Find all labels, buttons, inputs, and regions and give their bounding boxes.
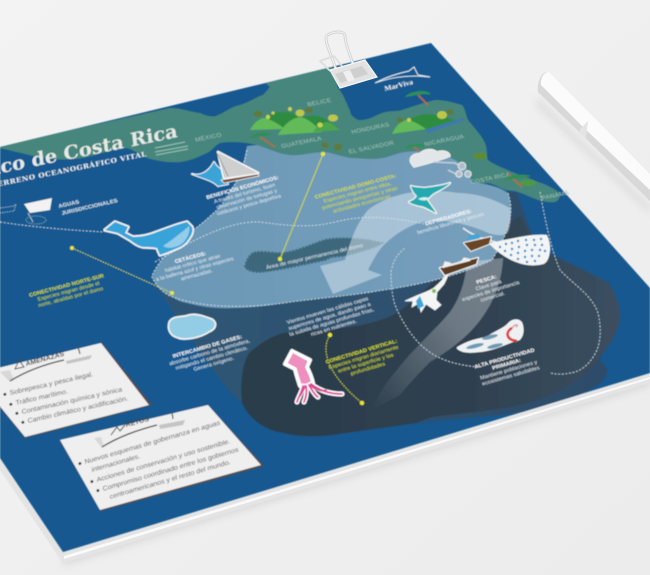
country labels: PANAMÁ bbox=[541, 190, 571, 202]
country labels: MÉXICO bbox=[194, 132, 223, 143]
text: conectividad norte-sur: CONECTIVIDAD NORTE-SUR bbox=[28, 273, 105, 299]
text: intercambio de gases: mitigando el cambio climático. bbox=[175, 345, 249, 372]
text: vientos: superiores de agua, dando paso a bbox=[288, 302, 373, 332]
text: vientos bbox=[285, 296, 378, 344]
list: retos: internacionales. bbox=[91, 453, 141, 474]
region: continental shelf (light water) bbox=[152, 145, 511, 308]
legend: aguas jurisdiccionales bbox=[0, 198, 119, 224]
text: depredadores: DEPREDADORES: bbox=[425, 209, 473, 227]
text: beneficios económicos: A través del turismo, buen bbox=[213, 182, 276, 205]
text: alta productividad primaria: ecosistemas saludables bbox=[481, 365, 541, 387]
list: amenazas: Tráfico marítimo. bbox=[15, 388, 68, 407]
text: beneficios económicos: cetáceos y pesca deportiva bbox=[216, 193, 282, 217]
text: intercambio de gases: absorbe carbono de la atmósfera, bbox=[168, 338, 252, 367]
text: intercambio de gases bbox=[166, 333, 256, 379]
text: intercambio de gases: Genera oxígeno. bbox=[193, 356, 236, 373]
big arrow: surface current curving down bbox=[320, 191, 511, 294]
text: conectividad domo-costa bbox=[314, 173, 404, 218]
legend: aguas jurisdiccionales: JURISDICCIONALES bbox=[61, 198, 119, 217]
icon: hills and trees Guatemala bbox=[250, 107, 342, 150]
binder clip bbox=[320, 32, 377, 88]
icon: squid bbox=[285, 351, 342, 402]
dashed lines bbox=[0, 150, 600, 374]
text: conectividad norte-sur: norte, atraídas por el domo bbox=[38, 286, 104, 309]
country labels bbox=[194, 98, 571, 202]
icon: blue whale bbox=[105, 222, 192, 255]
region: deep water mid layer bbox=[157, 190, 620, 436]
text: conectividad vertical: profundidades bbox=[350, 361, 386, 377]
country labels: BELICE bbox=[307, 98, 333, 108]
list: retos: Acciones de conservación y uso sostenible. bbox=[96, 438, 231, 484]
yellow link: connectivity north-south bbox=[70, 246, 174, 295]
text: conectividad vertical: CONECTIVIDAD VERTICAL: bbox=[325, 339, 399, 366]
text: alta productividad primaria: PRIMARIA: bbox=[492, 358, 522, 372]
text: vientos: ricas en nutrientes. bbox=[310, 319, 358, 338]
list: amenazas bbox=[3, 371, 129, 426]
legend: aguas jurisdiccionales: AGUAS bbox=[58, 200, 80, 210]
text: conectividad vertical bbox=[325, 339, 405, 383]
icon: large trawler and catch net bbox=[405, 258, 478, 312]
yellow link: connectivity dome-coast bbox=[278, 152, 325, 261]
list: amenazas: Cambio climático y acidificación. bbox=[27, 396, 129, 425]
text: beneficios económicos bbox=[205, 173, 286, 218]
text: pesca: comercial. bbox=[480, 291, 506, 304]
text: conectividad vertical: Especies migran diariamente bbox=[328, 345, 400, 371]
list: amenazas: Sobrepesca y pesca ilegal. bbox=[9, 371, 94, 397]
text: conectividad norte-sur: Especies migran desde el bbox=[37, 281, 101, 303]
text: conectividad domo-costa: actividades económicas bbox=[332, 194, 392, 215]
country labels: EL SALVADOR bbox=[348, 141, 396, 155]
banner: amenazas: AMENAZAS bbox=[25, 351, 65, 368]
text: cetáceos: hábitat crítico que atrae bbox=[164, 254, 221, 274]
pen on desk bbox=[535, 72, 650, 214]
text: beneficios económicos: observación de tortugas y bbox=[216, 188, 278, 211]
icon: cloud, gas exchange bbox=[169, 315, 215, 338]
text: intercambio de gases: INTERCAMBIO DE GASES: bbox=[172, 334, 243, 360]
text: pesca bbox=[457, 269, 522, 309]
text: conectividad norte-sur bbox=[28, 273, 109, 310]
text: beneficios económicos: BENEFICIOS ECONÓMICOS: bbox=[205, 173, 280, 201]
text: pesca: Clave para bbox=[475, 279, 503, 292]
icon: cloud with wind bbox=[410, 150, 471, 177]
country labels: HONDURAS bbox=[351, 123, 391, 136]
list: retos: centroamericanos y el resto del mundo. bbox=[109, 459, 231, 501]
icon: fish and shrimp bbox=[458, 321, 522, 352]
text: conectividad domo-costa: potenciando pesquerías y otras bbox=[321, 186, 399, 211]
text: pesca: PESCA: bbox=[476, 274, 498, 286]
icon: marlin bbox=[409, 183, 450, 213]
text: depredadores: beneficia tiburones y pescas bbox=[416, 212, 485, 236]
text: vientos: la subida de aguas profundas frías, bbox=[289, 307, 375, 338]
yellow link: connectivity vertical bbox=[326, 333, 364, 405]
icon: fishing boat with net bbox=[463, 228, 549, 264]
text: cetáceos bbox=[151, 244, 237, 289]
list: retos: Nuevos esquemas de gobernanza en aguas bbox=[84, 420, 221, 466]
icon: hills and palm Honduras bbox=[392, 92, 465, 134]
area of greatest permanence of the dome bbox=[245, 238, 382, 272]
text: alta productividad primaria: ALTA PRODUCTIVIDAD bbox=[474, 348, 536, 370]
text: cetáceos: CETÁCEOS: bbox=[174, 250, 207, 265]
panel: amenazas bbox=[0, 343, 152, 438]
icon: palm Nicaragua and Costa Rica bbox=[406, 145, 536, 187]
paper stack edge bbox=[0, 373, 650, 566]
text: alta productividad primaria bbox=[474, 348, 542, 388]
icon: sailboat and whale tail bbox=[192, 152, 259, 186]
land: Central America bbox=[0, 60, 560, 202]
text: cetáceos: a la ballena azul y otras especies bbox=[155, 256, 235, 283]
logo: MarViva: MarViva bbox=[384, 77, 414, 93]
banner: retos: RETOS bbox=[125, 416, 150, 429]
list: amenazas: Contaminación química y sónica bbox=[21, 386, 123, 416]
country labels: COSTA RICA bbox=[470, 172, 512, 186]
icon: palm tree Guatemala coast bbox=[248, 133, 275, 147]
title decoration lines bbox=[155, 142, 188, 155]
region: deepest water bbox=[241, 215, 620, 436]
list: retos bbox=[78, 420, 240, 501]
text: conectividad domo-costa: CONECTIVIDAD DOMO-COSTA: bbox=[314, 173, 398, 201]
text: alta productividad primaria: Mantiene poblaciones y bbox=[480, 360, 538, 381]
country labels: GUATEMALA bbox=[281, 136, 324, 150]
logo: MarViva bbox=[375, 67, 430, 93]
light beam: upwelling rising from the deep bbox=[381, 258, 504, 401]
list: retos: Compromiso coordinado entre los gobiernos bbox=[102, 447, 240, 493]
banner: amenazas bbox=[0, 347, 92, 382]
text: área de mayor permanencia: Área de mayor permanencia del domo bbox=[265, 242, 364, 271]
text: pesca: especies de importancia bbox=[461, 280, 520, 303]
country labels: NICARAGUA bbox=[424, 134, 466, 148]
text: cetáceos: amenazadas. bbox=[180, 268, 214, 282]
panel: retos bbox=[60, 405, 264, 511]
banner: retos bbox=[94, 412, 185, 448]
text: conectividad domo-costa: Especies migran entre ellos, bbox=[323, 181, 393, 205]
text: conectividad vertical: entre la superficie y las bbox=[337, 353, 395, 375]
text: vientos: Vientos mueven las cálidas capas bbox=[286, 296, 370, 326]
